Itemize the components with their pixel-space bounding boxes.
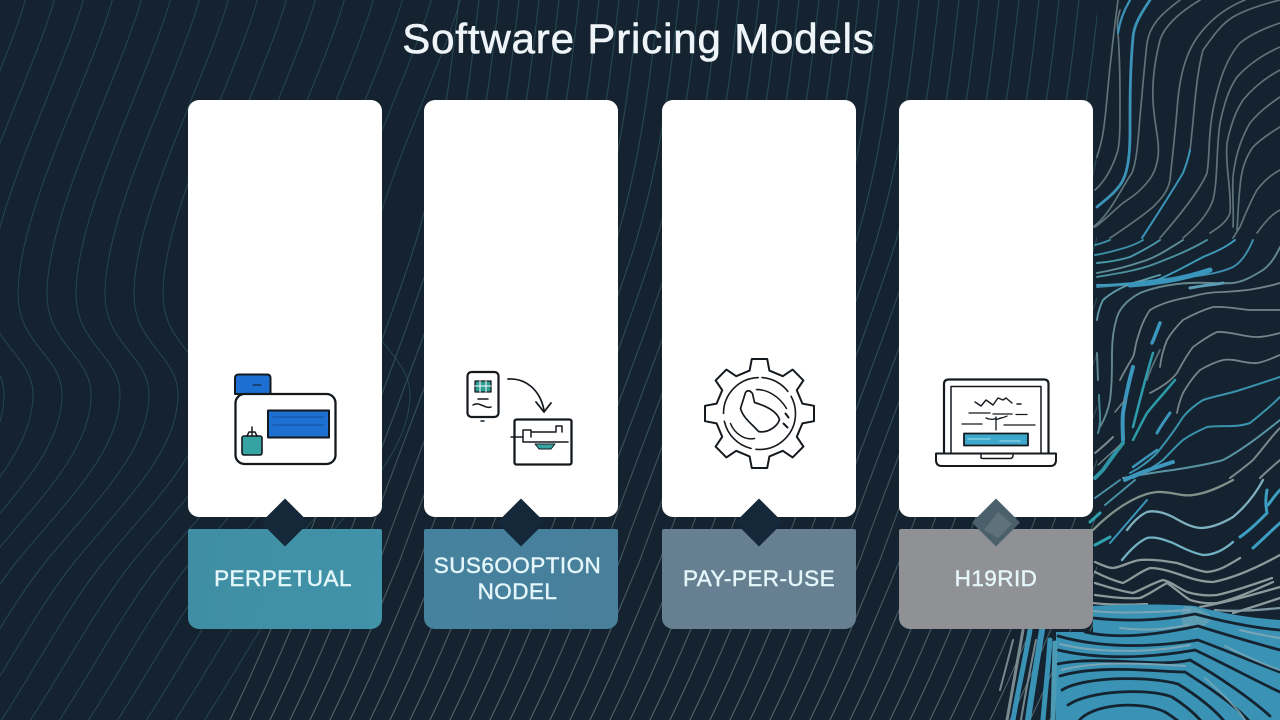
label: hybrid: H19RID <box>955 566 1037 591</box>
right waves: lower waves <box>1093 480 1280 613</box>
icon: gear <box>705 359 814 468</box>
label: perpetual <box>188 529 382 629</box>
label: perpetual: PERPETUAL <box>214 566 352 591</box>
icon: software folder <box>235 374 336 464</box>
panel: pay-per-use card <box>662 100 856 517</box>
connector: subscription diamond <box>497 498 545 546</box>
icon: hybrid laptop <box>936 380 1056 466</box>
panel: subscription card <box>424 100 618 517</box>
right waves: bottom blue mass <box>1056 604 1280 720</box>
icon: subscription phone and box <box>468 372 572 464</box>
panel: perpetual card <box>188 100 382 517</box>
right waves: middle grey contours <box>1120 283 1280 413</box>
bottom left fringe <box>1000 630 1055 720</box>
right waves: blue contours <box>1123 377 1280 478</box>
label: pay-per-use: PAY-PER-USE <box>683 566 835 591</box>
right waves: upper blue ribbons <box>1097 0 1190 238</box>
label: subscription model: SUS6OOPTION <box>434 553 601 578</box>
title: Software Pricing Models <box>402 15 875 62</box>
right waves: converging band <box>1095 240 1280 427</box>
label: subscription model: NODEL <box>478 579 557 604</box>
label: subscription model <box>424 529 618 629</box>
connector: pay-per-use diamond <box>735 498 783 546</box>
connector: hybrid diamond <box>972 498 1020 546</box>
label: pay-per-use <box>662 529 856 629</box>
right waves: upper contours <box>1093 0 1280 238</box>
label: hybrid <box>899 529 1093 629</box>
connector: perpetual diamond <box>261 498 309 546</box>
panel: hybrid card <box>899 100 1093 517</box>
right waves: tangled cluster strokes <box>1090 323 1175 545</box>
